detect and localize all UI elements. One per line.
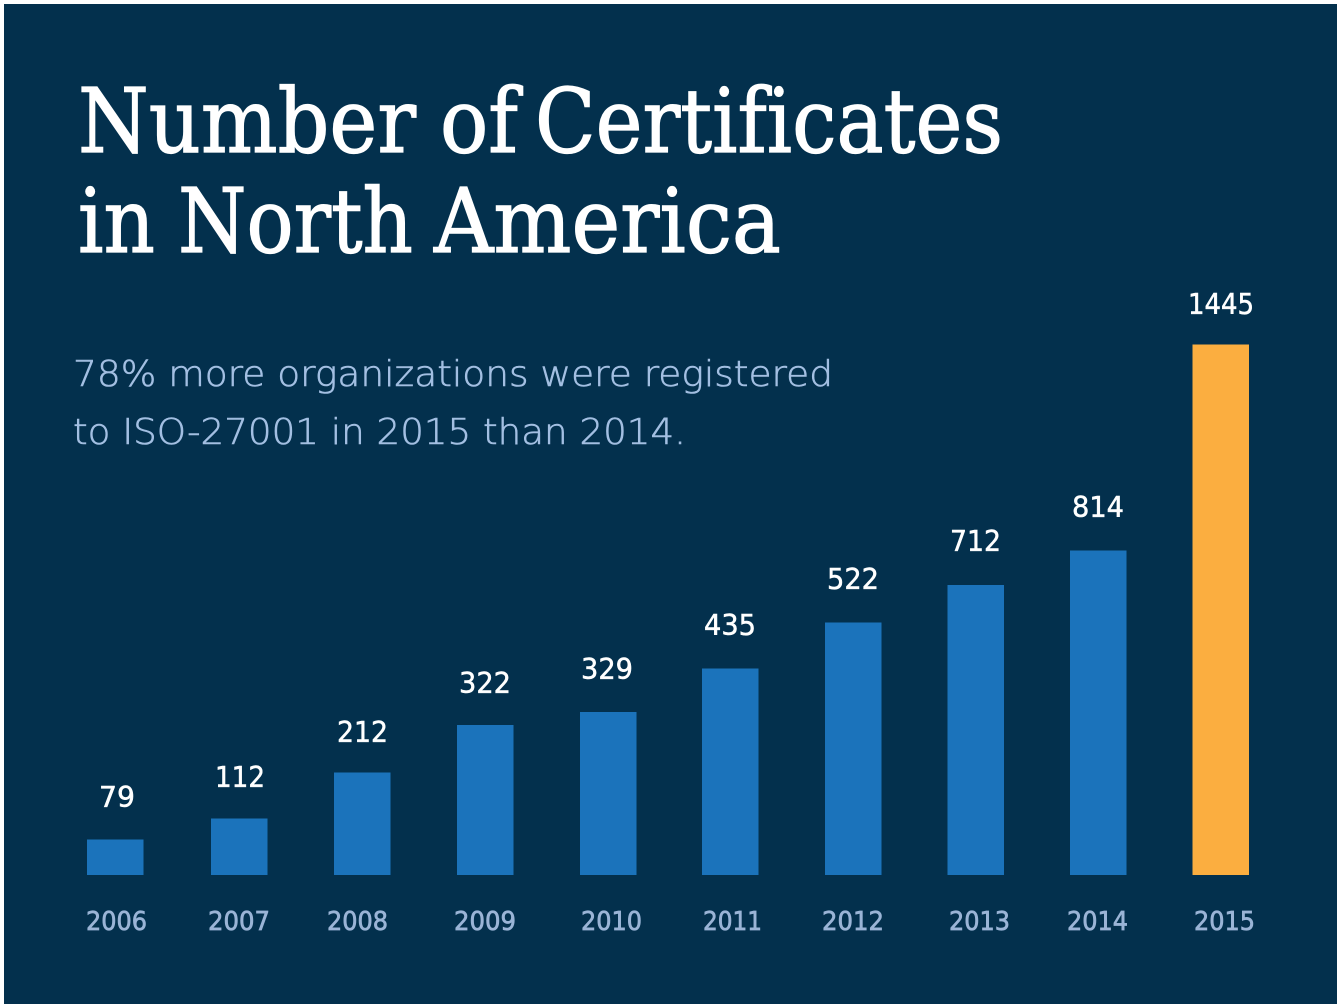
- year labels: 2007: [208, 907, 270, 937]
- title: in: [78, 169, 155, 273]
- year labels: 2013: [949, 907, 1010, 937]
- year labels: [86, 907, 1255, 937]
- year labels: 2015: [1194, 907, 1255, 937]
- value labels: 814: [1072, 491, 1124, 524]
- value labels: 329: [581, 653, 633, 686]
- subtitle text block: [73, 354, 833, 453]
- year labels: 2012: [822, 907, 884, 937]
- title: of: [440, 69, 523, 173]
- value labels: 79: [99, 781, 135, 814]
- highlighted bar: 2015: [1192, 344, 1249, 875]
- title: Certificates: [535, 69, 1003, 173]
- value labels: 212: [337, 716, 388, 749]
- value labels: 522: [827, 563, 879, 596]
- title: [78, 69, 1003, 273]
- value labels: 712: [950, 525, 1001, 558]
- title: North: [178, 169, 413, 273]
- year labels: 2010: [581, 907, 642, 937]
- bar chart: [86, 288, 1255, 937]
- year labels: 2011: [703, 907, 762, 937]
- value labels: 1445: [1188, 288, 1254, 321]
- title: Number: [78, 69, 416, 173]
- year labels: 2008: [327, 907, 388, 937]
- subtitle text block: to ISO-27001 in 2015 than 2014.: [73, 412, 686, 453]
- subtitle text block: 78% more organizations were registered: [73, 354, 833, 395]
- year labels: 2014: [1067, 907, 1128, 937]
- title: America: [433, 169, 781, 273]
- year labels: 2009: [454, 907, 516, 937]
- year labels: 2006: [86, 907, 147, 937]
- value labels: [99, 288, 1254, 814]
- value labels: 112: [215, 761, 265, 794]
- bars: [87, 550, 1126, 875]
- value labels: 322: [459, 667, 511, 700]
- value labels: 435: [704, 609, 756, 642]
